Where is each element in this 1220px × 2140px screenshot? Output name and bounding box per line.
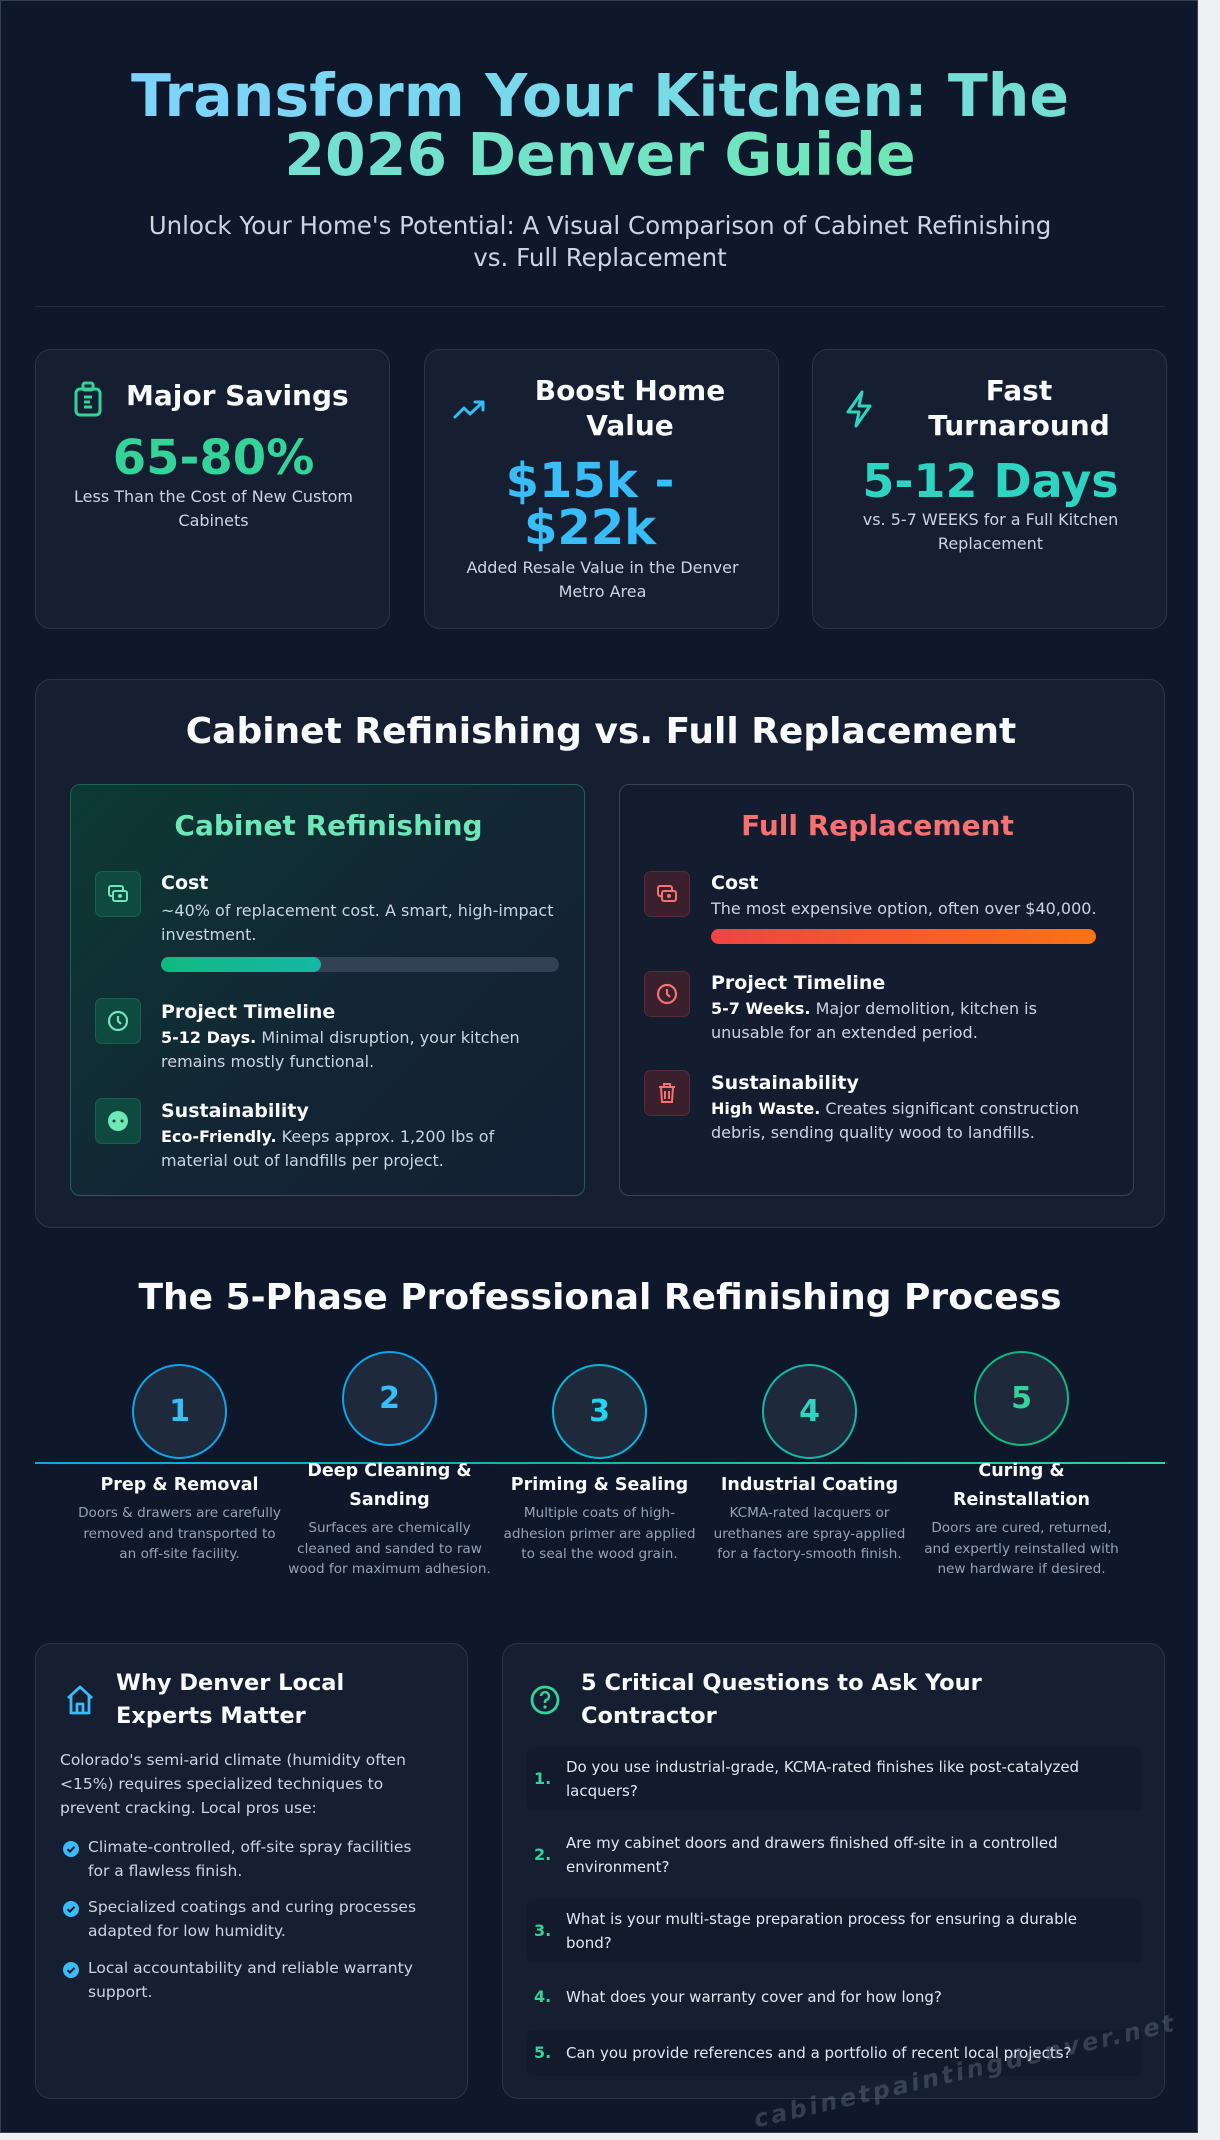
panel: full replacement: High Waste. Creates significant construction debris, sending quality wood to landfills. (711, 1099, 1079, 1142)
icon: trash (644, 1070, 690, 1116)
heading: Experts Matter (116, 1703, 306, 1729)
step 5: 5 (1011, 1381, 1032, 1416)
cost: Cost (161, 872, 208, 894)
step 3: 3 (589, 1394, 610, 1429)
stat: $15k - (506, 453, 674, 509)
panel: comparison (35, 679, 1165, 1228)
bullet list: Specialized coatings and curing processes adapted for low humidity. (88, 1898, 416, 1940)
step 5: Curing & Reinstallation (953, 1461, 1090, 1510)
cost: Cost (711, 872, 758, 894)
subtitle: Unlock Your Home's Potential: A Visual Comparison of Cabinet Refinishing (149, 211, 1051, 240)
step 4 (714, 1364, 905, 1562)
timeline: Project Timeline (711, 972, 885, 994)
bar: cost (161, 957, 559, 972)
step 5 (924, 1351, 1119, 1577)
body: Colorado's semi-arid climate (humidity often <15%) requires specialized techniques to prevent cracking. Local pros use: (60, 1751, 406, 1817)
question 5: 5. (534, 2043, 551, 2062)
step 4: 4 (799, 1394, 820, 1429)
question 1: Do you use industrial-grade, KCMA-rated finishes like post-catalyzed lacquers? (566, 1758, 1079, 1800)
question 5 (527, 2030, 1142, 2076)
heading (581, 1670, 982, 1729)
question 1 (527, 1747, 1142, 1811)
heading: Fast Turnaround (928, 374, 1110, 442)
icon: clock (644, 971, 690, 1017)
panel: full replacement: The most expensive option, often over $40,000. (711, 899, 1097, 918)
panel: cabinet refinishing: ~40% of replacement cost. A smart, high-impact investment. (161, 901, 553, 944)
title (131, 62, 1069, 189)
question 2: 2. (534, 1845, 551, 1864)
icon: clock (95, 998, 141, 1044)
stat: 65-80% (113, 430, 314, 486)
question 3: What is your multi-stage preparation process for ensuring a durable bond? (566, 1910, 1077, 1952)
description: Added Resale Value in the Denver Metro Area (466, 558, 739, 601)
step 2: Deep Cleaning & Sanding (307, 1461, 472, 1510)
step 3 (504, 1364, 696, 1562)
title: Transform Your Kitchen: The (131, 62, 1069, 130)
icon: house (67, 1686, 93, 1714)
heading: Major Savings (126, 379, 349, 412)
icon: trend (453, 400, 485, 419)
icon: question (530, 1686, 560, 1714)
question 3: 3. (534, 1921, 551, 1940)
card: boost home value (424, 349, 779, 629)
sustainability: Sustainability (711, 1072, 859, 1094)
heading: Boost Home Value (535, 374, 725, 442)
step 2 (288, 1351, 491, 1577)
subtitle: vs. Full Replacement (473, 243, 727, 272)
step 4: KCMA-rated lacquers or urethanes are spray-applied for a factory-smooth finish. (714, 1505, 905, 1562)
step 1: 1 (169, 1394, 190, 1429)
bullet list: Local accountability and reliable warranty support. (88, 1959, 413, 2001)
panel: 5 critical questions (502, 1643, 1165, 2099)
heading: Cabinet Refinishing vs. Full Replacement (186, 711, 1016, 752)
step 4: Industrial Coating (721, 1475, 898, 1495)
card: fast turnaround (812, 349, 1167, 629)
heading: Contractor (581, 1703, 717, 1729)
question 3 (527, 1899, 1142, 1963)
card: major savings (35, 349, 390, 629)
panel: full replacement (619, 784, 1134, 1196)
step 2: Surfaces are chemically cleaned and sanded to raw wood for maximum adhesion. (288, 1520, 491, 1577)
heading: Why Denver Local (116, 1670, 344, 1696)
title: 2026 Denver Guide (284, 121, 916, 189)
subtitle (149, 211, 1051, 272)
icon: cash (644, 871, 690, 917)
icon: leaf (95, 1098, 141, 1144)
sustainability: Sustainability (161, 1100, 309, 1122)
description: Less Than the Cost of New Custom Cabinets (74, 487, 353, 530)
question 4: 4. (534, 1987, 551, 2006)
question 2: Are my cabinet doors and drawers finished off-site in a controlled environment? (566, 1834, 1058, 1876)
stat: $22k (524, 500, 656, 556)
step 3: Priming & Sealing (511, 1475, 688, 1495)
step 1: Prep & Removal (100, 1475, 259, 1495)
icon: cash (95, 871, 141, 917)
timeline line (35, 1462, 1165, 1464)
panel: full replacement: 5-7 Weeks. Major demolition, kitchen is unusable for an extended period. (711, 999, 1037, 1042)
bullet list: Climate-controlled, off-site spray facilities for a flawless finish. (88, 1838, 411, 1880)
step 1: Doors & drawers are carefully removed and transported to an off-site facility. (78, 1505, 281, 1562)
bullet list (63, 1838, 416, 2001)
heading (116, 1670, 344, 1729)
question 1: 1. (534, 1769, 551, 1788)
heading: Full Replacement (741, 809, 1014, 842)
panel: why denver local experts (35, 1643, 468, 2099)
heading: 5 Critical Questions to Ask Your (581, 1670, 982, 1696)
question 5: Can you provide references and a portfolio of recent local projects? (566, 2044, 1072, 2062)
question 4: What does your warranty cover and for how long? (566, 1988, 942, 2006)
step 1 (78, 1364, 281, 1562)
heading: Cabinet Refinishing (174, 809, 483, 842)
stat: 5-12 Days (862, 454, 1119, 508)
step 5: Doors are cured, returned, and expertly reinstalled with new hardware if desired. (924, 1520, 1119, 1577)
process heading: The 5-Phase Professional Refinishing Process (138, 1277, 1062, 1318)
timeline: Project Timeline (161, 1001, 335, 1023)
icon: bolt (846, 390, 872, 428)
bar: cost (711, 929, 1096, 944)
icon: savings (74, 382, 102, 416)
step 2: 2 (379, 1381, 400, 1416)
description: vs. 5-7 WEEKS for a Full Kitchen Replacement (863, 510, 1118, 553)
panel: cabinet refinishing (70, 784, 585, 1196)
panel: cabinet refinishing: 5-12 Days. Minimal disruption, your kitchen remains mostly functional. (161, 1028, 520, 1071)
stat (506, 453, 674, 556)
step 3: Multiple coats of high-adhesion primer are applied to seal the wood grain. (504, 1505, 696, 1562)
panel: cabinet refinishing: Eco-Friendly. Keeps approx. 1,200 lbs of material out of landfills per project. (161, 1127, 494, 1170)
watermark: cabinetpaintingdenver.net (751, 2009, 1179, 2133)
